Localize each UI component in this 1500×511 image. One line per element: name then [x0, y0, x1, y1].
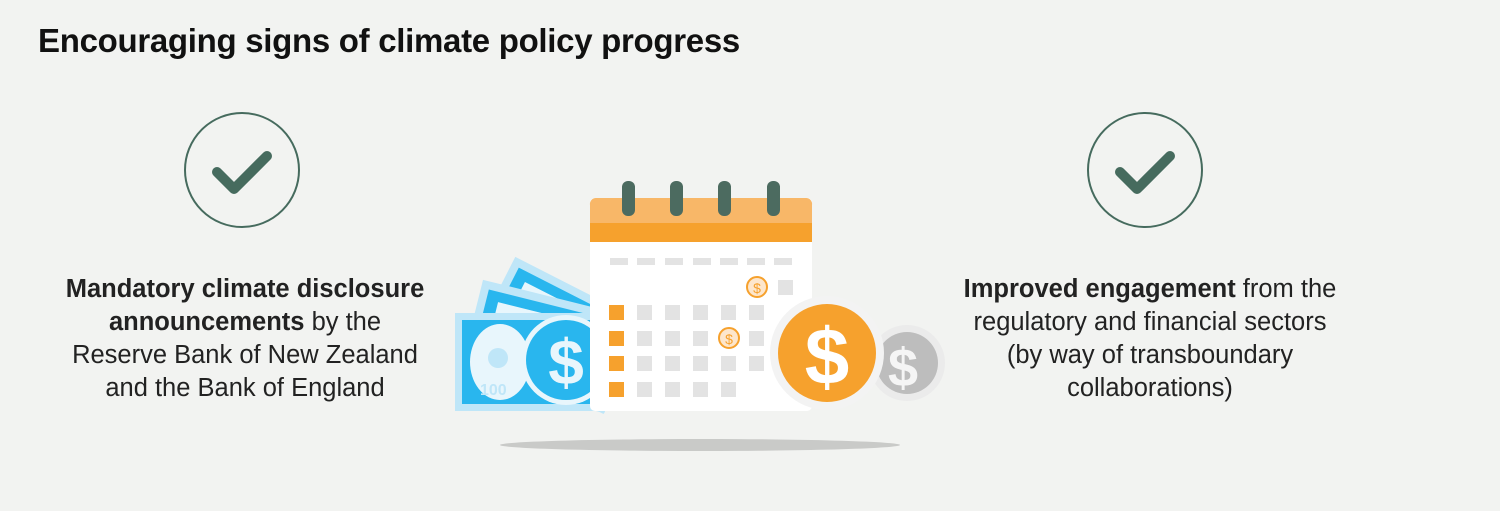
illustration: calendar with money: $	[805, 312, 849, 401]
illustration: calendar with money: 100	[480, 382, 507, 399]
text: left: announcements by the	[109, 308, 381, 336]
text: right: collaborations)	[1067, 374, 1233, 402]
text: left: Reserve Bank of New Zealand	[72, 341, 418, 369]
text: left: Mandatory climate disclosure	[66, 275, 424, 303]
icon: left check	[184, 112, 300, 228]
text: left: and the Bank of England	[105, 374, 385, 402]
icon: right check	[1087, 112, 1203, 228]
illustration: calendar with money: $	[548, 326, 584, 398]
title: Encouraging signs of climate policy progress	[38, 22, 740, 59]
illustration: calendar with money: $	[725, 331, 733, 347]
text: left	[66, 275, 424, 402]
text: right: regulatory and financial sectors	[974, 308, 1326, 336]
text: right: (by way of transboundary	[1007, 341, 1293, 369]
text: right: Improved engagement from the	[964, 275, 1336, 303]
illustration: calendar with money: $	[753, 280, 761, 296]
text: right	[964, 275, 1336, 402]
illustration: calendar with money: $	[888, 338, 918, 398]
